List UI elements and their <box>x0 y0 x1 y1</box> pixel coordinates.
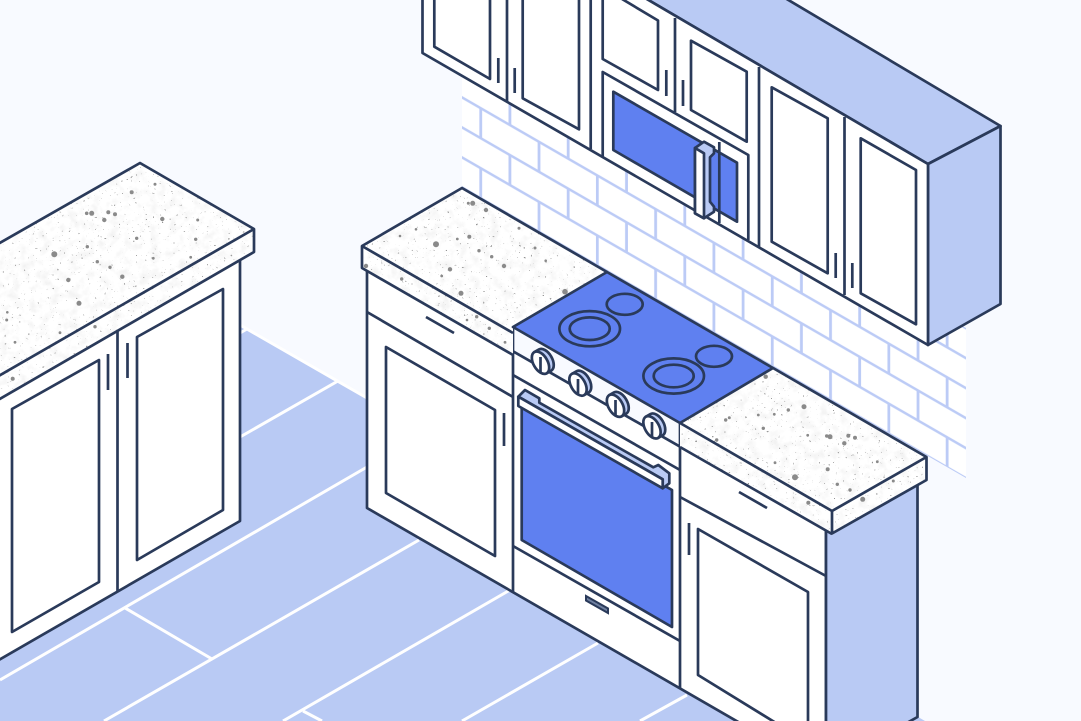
microwave handle <box>695 142 714 218</box>
left countertop outline <box>0 163 254 400</box>
door handles <box>504 413 689 555</box>
cabinet top face <box>645 0 1000 164</box>
drawer seams <box>367 312 826 576</box>
stove knobs <box>528 346 669 441</box>
end panel <box>826 481 918 721</box>
stovetop <box>513 272 773 423</box>
right door panel <box>698 529 808 721</box>
granite speckles <box>715 374 895 505</box>
main countertop <box>360 186 610 358</box>
knob 4 <box>640 411 669 441</box>
front left burner <box>559 311 620 346</box>
left cabinet door panels <box>12 360 99 632</box>
cabinet front face <box>422 0 928 345</box>
granite speckles <box>5 183 199 381</box>
knob 1 <box>528 346 557 377</box>
cabinet door dividers <box>507 0 844 295</box>
oven <box>513 375 680 641</box>
oven door bottom <box>513 546 680 641</box>
right countertop <box>678 366 928 538</box>
cabinet verticals <box>513 327 680 688</box>
granite speckles <box>364 201 568 344</box>
left door panel <box>386 347 495 556</box>
tiled back wall <box>462 38 966 478</box>
cabinet side face <box>928 126 1000 345</box>
left countertop <box>0 160 256 400</box>
microwave body <box>603 72 748 240</box>
upper door panels <box>434 0 916 324</box>
upper cabinets <box>422 0 1000 345</box>
oven handle <box>518 390 669 488</box>
knob 2 <box>566 368 595 399</box>
microwave window <box>613 92 737 222</box>
left cabinet handles <box>108 343 128 390</box>
main base cabinets <box>367 268 826 721</box>
main cabinet body <box>367 268 826 721</box>
main countertop outline <box>362 188 607 355</box>
bottom vent <box>586 596 608 613</box>
back right burner <box>696 346 732 367</box>
left base cabinet <box>0 252 240 661</box>
right countertop outline <box>680 368 926 534</box>
control panel seam <box>513 375 680 470</box>
knob 3 <box>603 389 632 420</box>
back left burner <box>607 294 643 315</box>
left cabinet body <box>0 252 240 661</box>
oven glass <box>522 404 672 627</box>
front right burner <box>643 358 704 394</box>
floor <box>0 325 925 721</box>
drawer handles <box>426 317 767 508</box>
left cabinet divider <box>116 328 119 591</box>
upper door handles <box>498 58 852 288</box>
microwave <box>603 72 748 240</box>
